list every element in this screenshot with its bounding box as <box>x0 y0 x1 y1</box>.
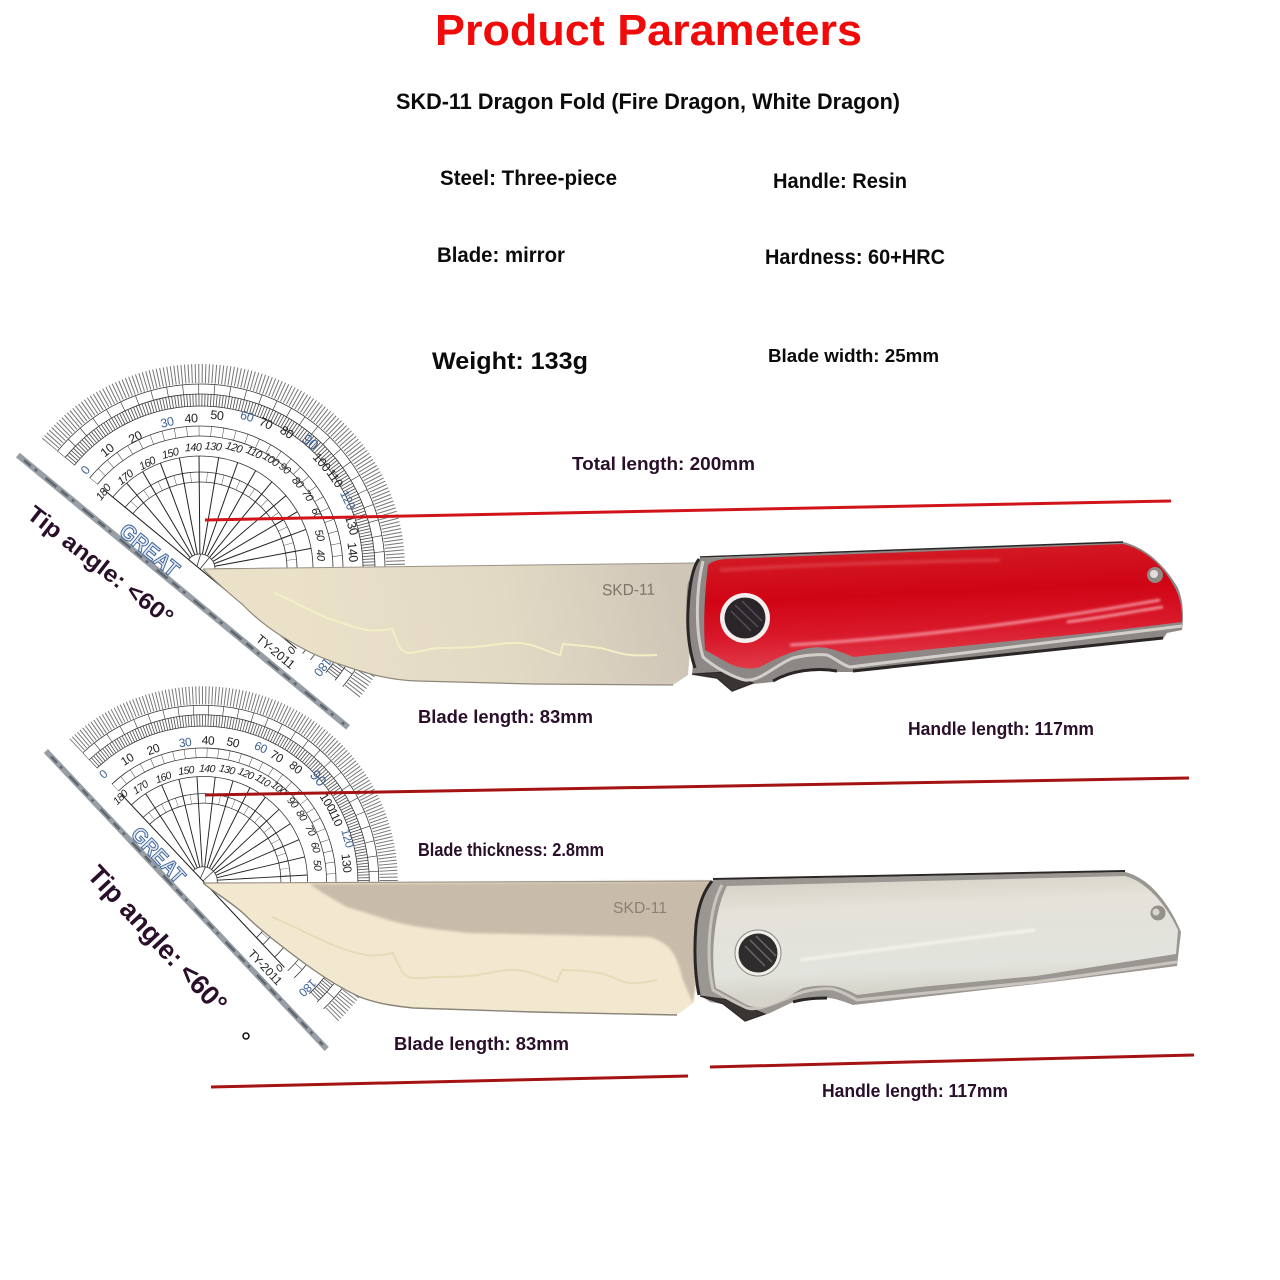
handle pin <box>1147 567 1163 583</box>
protractor: bottom: TY-2011 <box>245 947 285 988</box>
label: handle length bottom: Handle length: 117mm <box>822 1081 1008 1101</box>
protractor: bottom: 30 <box>178 735 193 750</box>
protractor: bottom: 160 <box>154 769 173 786</box>
spec: hardness: Hardness: 60+HRC <box>765 246 945 269</box>
handle: steel highlights <box>709 885 1177 1009</box>
spec: blade width: Blade width: 25mm <box>768 346 939 366</box>
pivot disk <box>720 593 770 643</box>
protractor: bottom: 100 <box>268 779 289 799</box>
protractor: top: GREAT <box>115 518 185 582</box>
handle: white scale <box>713 876 1178 1007</box>
protractor: bottom <box>44 686 398 1051</box>
protractor: bottom: 70 <box>268 747 286 766</box>
protractor: bottom: 140 <box>199 763 216 775</box>
spec: weight: Weight: 133g <box>432 348 588 375</box>
label: blade length top: Blade length: 83mm <box>418 707 593 727</box>
protractor: bottom: 60 <box>252 739 270 757</box>
label: handle length top: Handle length: 117mm <box>908 719 1094 739</box>
label: blade length bottom: Blade length: 83mm <box>394 1034 569 1054</box>
protractor: top: 140 <box>184 441 203 454</box>
protractor: top: 100 <box>260 450 282 470</box>
handle pin <box>1150 906 1166 920</box>
label: tip angle top: Tip angle: <60° <box>22 500 179 630</box>
protractor: top: 180 <box>94 481 115 503</box>
protractor: bottom: 100 <box>317 791 339 815</box>
protractor: top: 70 <box>299 488 316 505</box>
protractor: top: 160 <box>137 454 159 473</box>
protractor: bottom: GREAT <box>126 823 190 889</box>
protractor: bottom: 70 <box>302 823 318 838</box>
handle: red scale <box>704 544 1182 668</box>
degree mark <box>243 1033 249 1039</box>
label: tip angle bottom: Tip angle: <60° <box>82 860 233 1019</box>
blade: top knife <box>203 563 697 685</box>
spec: steel: Steel: Three-piece <box>440 167 617 190</box>
protractor: bottom: 10 <box>118 750 137 769</box>
protractor: top: 50 <box>210 408 225 423</box>
protractor: top: 20 <box>126 428 145 447</box>
protractor: top: 50 <box>312 528 327 544</box>
protractor: bottom: 80 <box>293 808 309 824</box>
protractor: top: 80 <box>277 423 296 442</box>
label: total length: Total length: 200mm <box>572 454 755 474</box>
protractor: bottom: 50 <box>310 859 324 872</box>
product name: SKD-11 Dragon Fold (Fire Dragon, White Dragon) <box>396 89 900 114</box>
protractor: bottom: 0 <box>96 767 111 782</box>
protractor: top: 80 <box>289 475 306 492</box>
handle highlight <box>800 930 1035 960</box>
protractor: top: 30 <box>159 414 176 431</box>
protractor: top: 130 <box>204 440 223 454</box>
protractor: bottom: 180 <box>296 976 319 1000</box>
protractor: bottom: 40 <box>201 733 215 748</box>
blade: bottom knife <box>203 881 710 1015</box>
protractor: bottom: 120 <box>236 765 256 783</box>
protractor: top: 70 <box>257 414 275 433</box>
label: blade thickness: Blade thickness: 2.8mm <box>418 840 604 860</box>
protractor: top: 120 <box>224 440 245 456</box>
measure line: blade length <box>211 1076 688 1087</box>
protractor: bottom: 120 <box>338 827 357 850</box>
pivot disk <box>735 930 781 976</box>
protractor: bottom: 130 <box>218 762 237 778</box>
protractor: bottom: 80 <box>286 758 306 777</box>
protractor: bottom: 130 <box>338 853 355 874</box>
knife: white handle <box>203 871 1181 1022</box>
protractor: top: 100 <box>310 450 334 475</box>
protractor: top: TY-2011 <box>253 632 298 672</box>
protractor: top: 110 <box>244 444 265 462</box>
knife: red handle <box>203 542 1183 692</box>
protractor: top: 0 <box>284 643 298 656</box>
measure line: total length <box>205 501 1171 520</box>
protractor: top: 130 <box>342 514 361 537</box>
spec: blade: Blade: mirror <box>437 244 565 267</box>
measure line: handle length <box>710 1055 1194 1067</box>
handle: steel frame <box>686 542 1183 692</box>
protractor: bottom: 60 <box>308 841 322 855</box>
protractor: bottom: 170 <box>131 778 151 797</box>
protractor: top: 10 <box>98 441 117 460</box>
protractor: bottom: 110 <box>325 806 346 829</box>
protractor: top: 110 <box>324 467 346 490</box>
protractor: top: 0 <box>78 463 93 477</box>
protractor: top: 60 <box>308 506 324 522</box>
measure line: overall bottom knife <box>205 778 1189 795</box>
protractor: top: 40 <box>184 411 198 426</box>
protractor: bottom: 110 <box>253 772 273 790</box>
protractor: bottom: 50 <box>225 734 241 751</box>
protractor: bottom: 0 <box>273 961 285 974</box>
blade: top knife: SKD-11 <box>602 582 655 599</box>
handle highlights <box>720 560 1163 645</box>
handle: steel highlights <box>697 561 1182 680</box>
protractor: top: 90 <box>276 461 294 478</box>
protractor: top: 170 <box>115 467 137 488</box>
protractor: top: 140 <box>345 542 361 563</box>
handle: steel frame <box>694 872 1181 1022</box>
handle: dark edges <box>695 871 1125 1021</box>
protractor: top: 150 <box>161 446 181 462</box>
protractor: bottom: 90 <box>306 767 329 790</box>
protractor: top <box>16 364 405 730</box>
protractor: top: 90 <box>298 431 321 454</box>
protractor: top: 40 <box>313 549 327 563</box>
protractor: top: 180 <box>311 655 334 679</box>
protractor: bottom: 20 <box>145 741 162 758</box>
protractor: top: 60 <box>239 408 256 425</box>
blade: bottom knife: SKD-11 <box>613 900 667 917</box>
spec: handle: Handle: Resin <box>773 170 907 193</box>
protractor: top: 120 <box>337 488 358 512</box>
title: Product Parameters <box>435 6 862 55</box>
protractor: bottom: 90 <box>284 795 301 811</box>
handle: dark edges <box>688 542 1163 691</box>
protractor: bottom: 150 <box>178 764 196 778</box>
protractor: bottom: 180 <box>111 787 131 808</box>
